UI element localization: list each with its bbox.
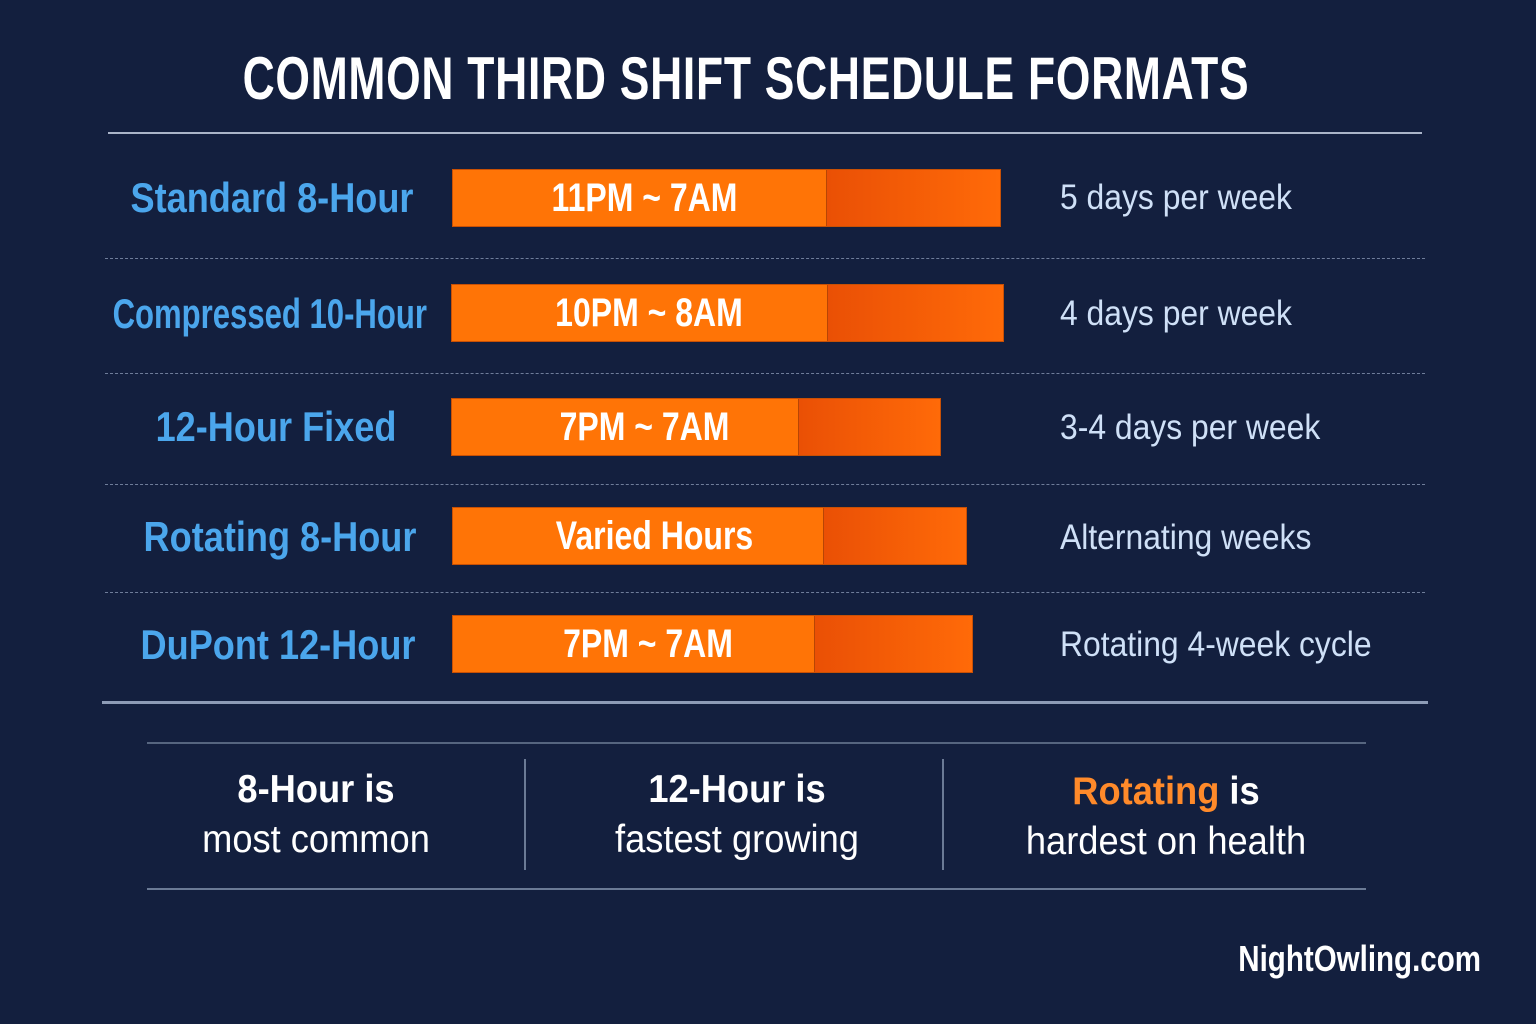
summary: 12-hour: fastest growing bbox=[615, 818, 859, 861]
summary: 12-hour bbox=[615, 768, 859, 861]
bar: 12-Hour Fixed bbox=[451, 398, 941, 456]
right text: rotating cycle: Rotating 4-week cycle bbox=[1060, 625, 1372, 664]
right text: alternating: Alternating weeks bbox=[1060, 518, 1311, 557]
summary: rotating: hardest on health bbox=[1026, 820, 1306, 863]
bar: Standard 8-Hour: 11PM ~ 7AM bbox=[552, 176, 737, 220]
bar: Compressed 10-Hour: 10PM ~ 8AM bbox=[555, 291, 743, 335]
summary: 8-hour: 8-Hour is bbox=[237, 768, 395, 811]
bar: Compressed 10-Hour bbox=[451, 284, 1004, 342]
row label: 12-Hour Fixed: 12-Hour Fixed bbox=[156, 403, 396, 450]
summary: 8-hour bbox=[202, 768, 430, 861]
row label: Compressed 10-Hour: Compressed 10-Hour bbox=[113, 290, 427, 337]
right text: 3-4 days: 3-4 days per week bbox=[1060, 408, 1320, 447]
row label: DuPont 12-Hour: DuPont 12-Hour bbox=[141, 621, 415, 668]
right text: 4 days: 4 days per week bbox=[1060, 294, 1292, 333]
summary panel bbox=[147, 742, 1366, 890]
summary: rotating: Rotating is bbox=[1072, 770, 1260, 813]
summary: rotating bbox=[1026, 770, 1306, 863]
footer brand: NightOwling.com bbox=[1238, 938, 1481, 979]
bar: Rotating 8-Hour bbox=[452, 507, 967, 565]
summary: 8-hour: most common bbox=[202, 818, 430, 861]
title: COMMON THIRD SHIFT SCHEDULE FORMATS bbox=[243, 45, 1249, 112]
right text: 5 days: 5 days per week bbox=[1060, 178, 1292, 217]
bar: 12-Hour Fixed: 7PM ~ 7AM bbox=[560, 405, 729, 449]
bar: Rotating 8-Hour: Varied Hours bbox=[556, 514, 753, 558]
bar: DuPont 12-Hour: 7PM ~ 7AM bbox=[563, 622, 733, 666]
summary: 12-hour: 12-Hour is bbox=[648, 768, 826, 811]
bar: Standard 8-Hour bbox=[452, 169, 1001, 227]
bar: DuPont 12-Hour bbox=[452, 615, 973, 673]
row label: Standard 8-Hour: Standard 8-Hour bbox=[131, 174, 413, 221]
row label: Rotating 8-Hour: Rotating 8-Hour bbox=[144, 513, 416, 560]
